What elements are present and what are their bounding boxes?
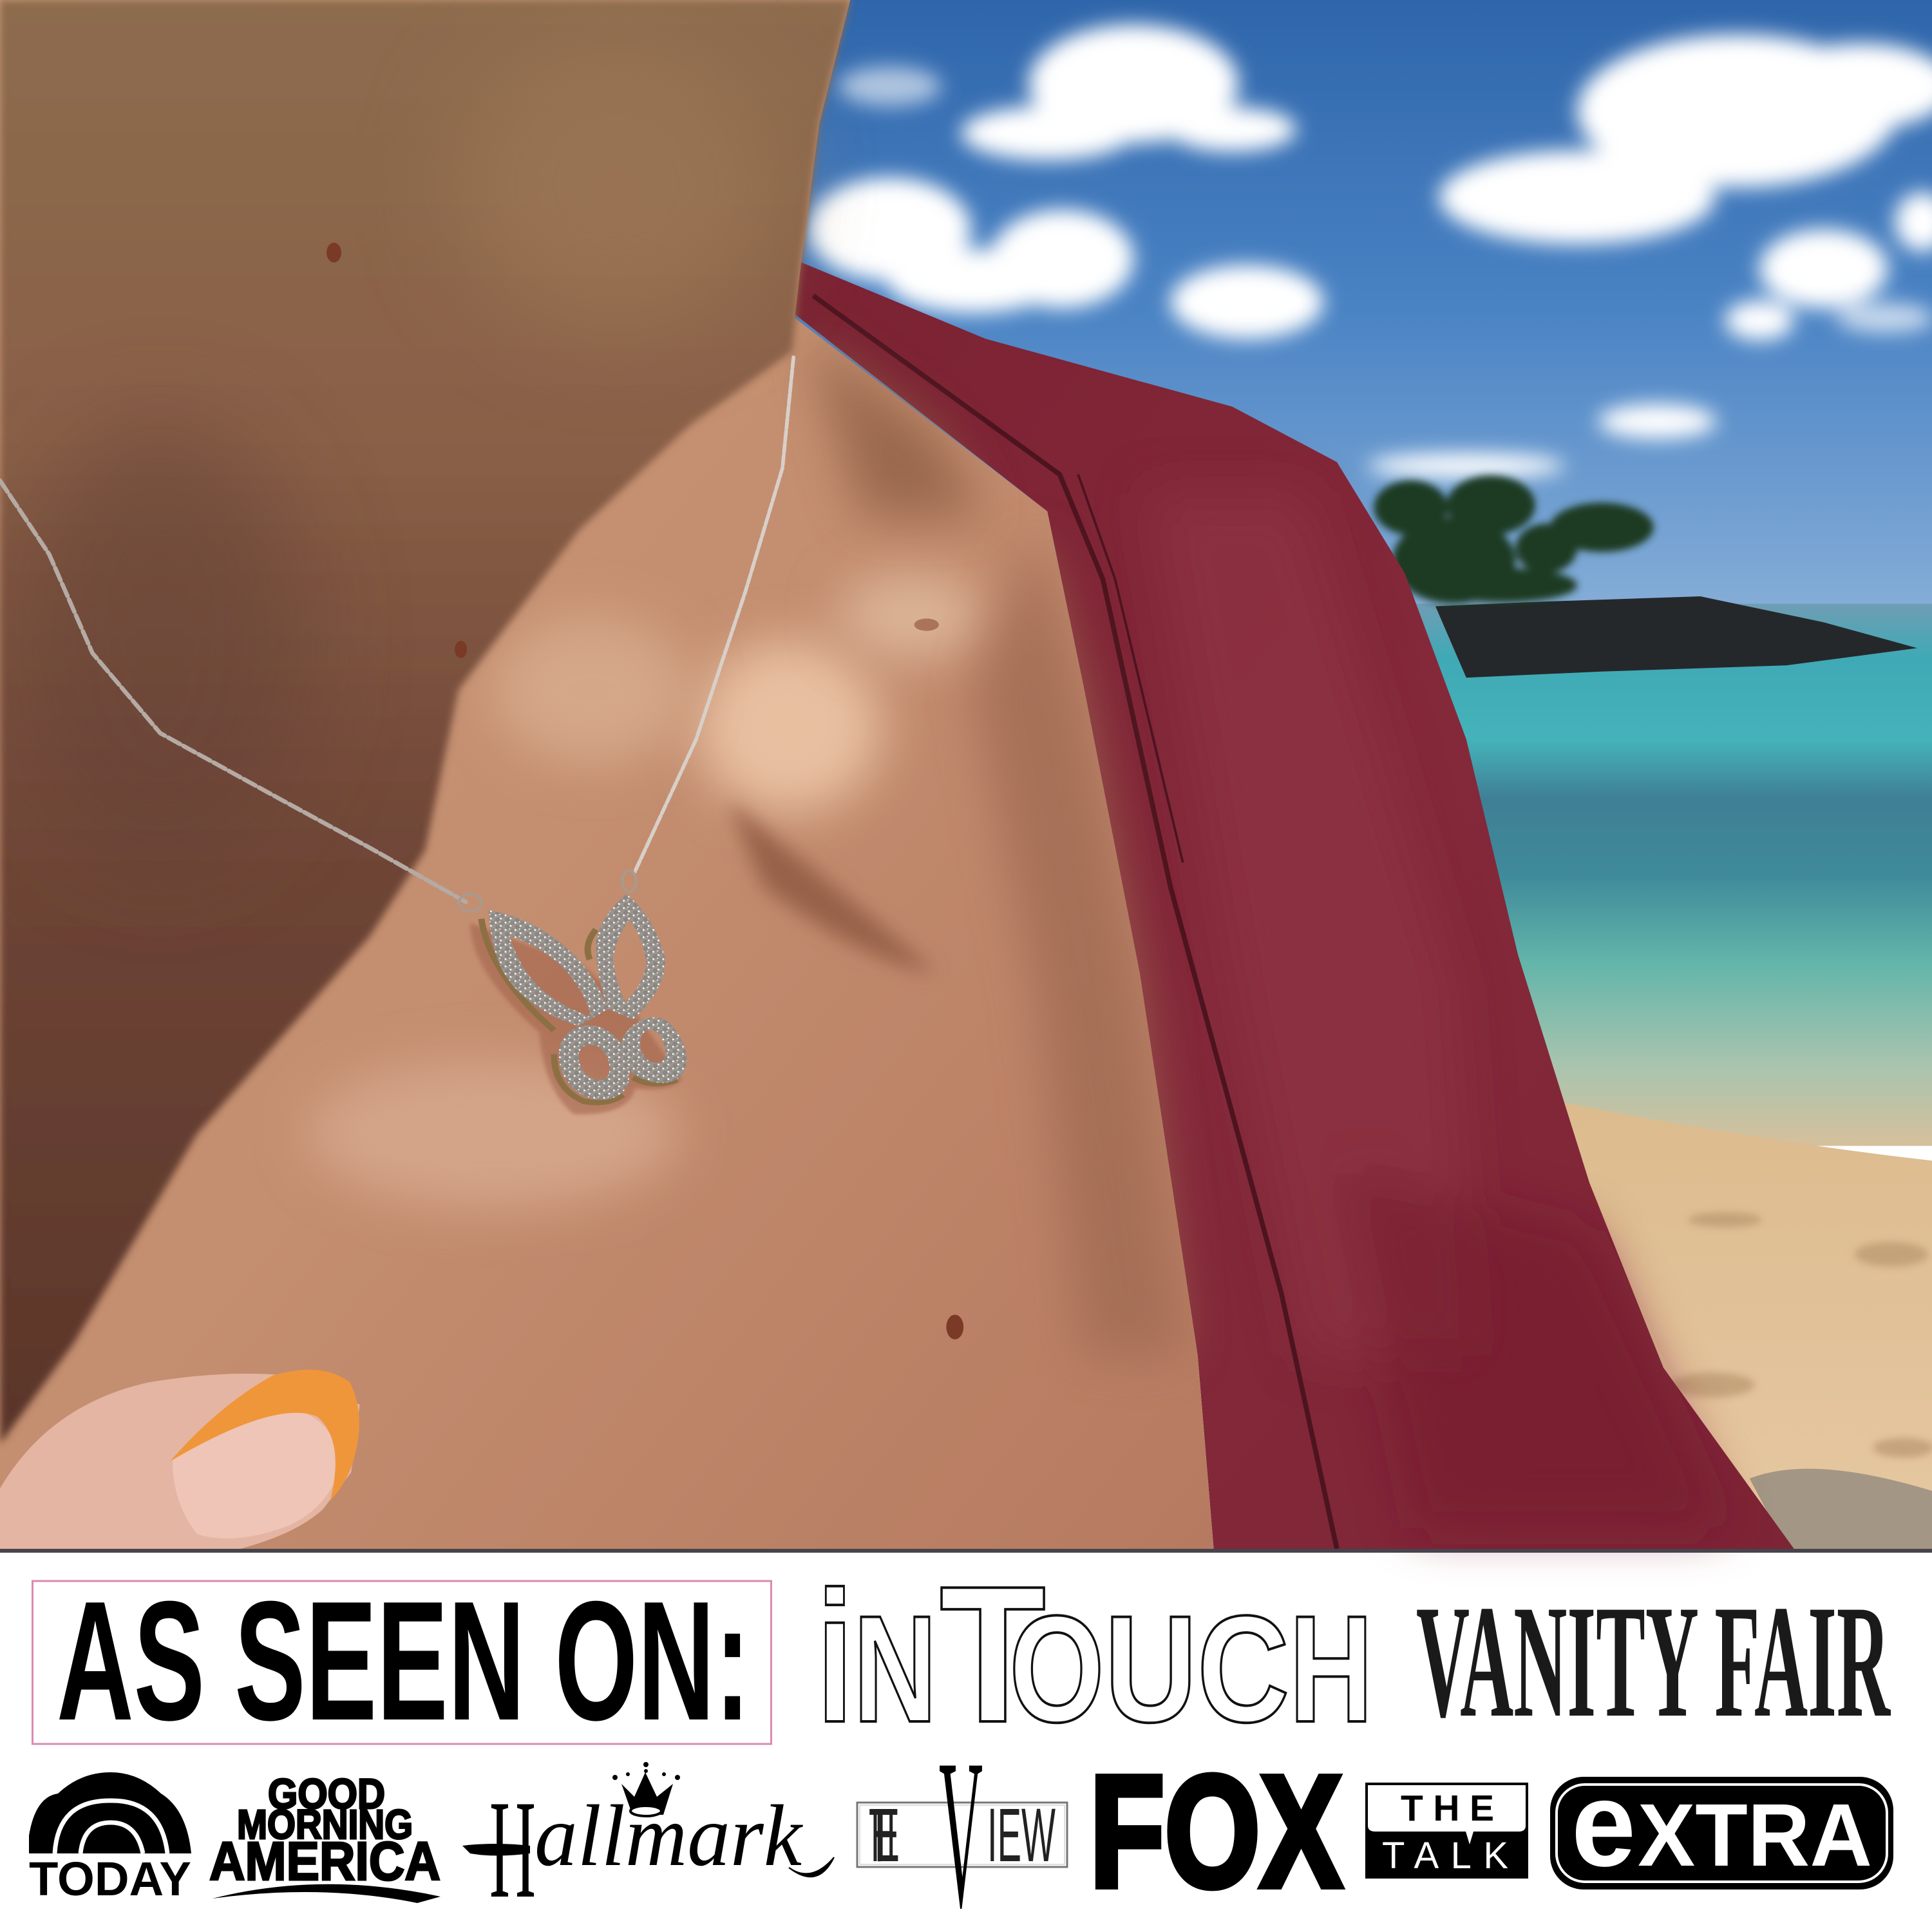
- view frame: [857, 1803, 1067, 1867]
- left wing: [489, 910, 608, 1026]
- gma swoosh: [213, 1884, 440, 1903]
- talk label: the: THE: [1401, 1788, 1494, 1829]
- coral rock: [1750, 1469, 1932, 1549]
- logo: in touch: H: [1289, 1584, 1373, 1754]
- palm trees: [1374, 476, 1654, 604]
- hallmark tail: [789, 1857, 834, 1877]
- finger with orange nail: [0, 1370, 360, 1549]
- right wing: [596, 894, 665, 1019]
- chain: [0, 357, 793, 902]
- logo: in touch: [817, 1546, 1373, 1763]
- rocky island: [1435, 596, 1917, 677]
- neck shadow tonal variation: [12, 37, 776, 862]
- view label: the: THE: [869, 1793, 900, 1878]
- shirt seam: [813, 296, 1337, 1549]
- hallmark script: allmark: [535, 1788, 804, 1884]
- finger: [0, 1374, 360, 1549]
- logo: good morning america: GOOD: [268, 1770, 385, 1817]
- footprints in the sand: [1671, 1213, 1932, 1457]
- clouds: [808, 24, 1932, 478]
- pendant bail loops: [459, 871, 636, 911]
- logo: in touch: i: [817, 1553, 853, 1761]
- photo lower edge band: [0, 1549, 1932, 1553]
- extra badge: [1550, 1777, 1893, 1889]
- skin highlights and hollows: [308, 333, 1183, 1356]
- nail: [173, 1407, 340, 1539]
- skin: lit chest: [0, 0, 1214, 1549]
- sky: [788, 0, 1932, 616]
- logo: the view: [857, 1715, 1067, 1932]
- logo: hallmark: [462, 1762, 834, 1927]
- today wordmark: TODAY: [29, 1852, 191, 1906]
- callout box: as seen on: [32, 1566, 772, 1756]
- shirt shoulder: [795, 261, 1794, 1549]
- logo: good morning america: AMERICA: [209, 1831, 440, 1891]
- speech bubble: [1368, 1785, 1526, 1844]
- logo: in touch: N: [853, 1584, 937, 1754]
- logo: in touch: U: [1104, 1584, 1197, 1754]
- talk box: [1365, 1783, 1528, 1879]
- logo: extra: XTRA: [1638, 1786, 1872, 1885]
- logo: extra: [1550, 1756, 1893, 1891]
- pink frame: [32, 1581, 772, 1744]
- sand beach: [1565, 1103, 1932, 1549]
- right ring: [621, 1018, 687, 1083]
- pendant cast shadow: [470, 923, 682, 1114]
- logo: in touch: T: [940, 1546, 1046, 1763]
- moles: [327, 243, 963, 1340]
- left ring: [559, 1025, 630, 1100]
- hallmark crossbar: [462, 1844, 530, 1856]
- crown: [612, 1762, 680, 1816]
- today rainbow arches: [29, 1772, 191, 1853]
- logo: the talk: [1365, 1783, 1528, 1879]
- neck shadow: [0, 0, 850, 1444]
- pendant metal edge: [481, 919, 677, 1103]
- logo: hallmark: H: [489, 1772, 536, 1927]
- butterfly pendant: [459, 871, 687, 1114]
- logo: the view: IEW: [987, 1793, 1056, 1878]
- logo: in touch: O: [1009, 1584, 1104, 1754]
- sea: [1356, 604, 1932, 1146]
- shirt folds and light: [1146, 493, 1725, 1528]
- logo: in touch: C: [1197, 1584, 1289, 1754]
- logo: good morning america: MORNING: [237, 1801, 413, 1848]
- logo: today: [29, 1772, 191, 1906]
- extra wordmark: e: [1571, 1756, 1636, 1891]
- logo: fox: FOX: [1090, 1743, 1342, 1920]
- talk label: talk: TALK: [1382, 1835, 1508, 1877]
- orange french tip: [170, 1370, 359, 1501]
- heading: as seen on: AS SEEN ON:: [57, 1566, 750, 1756]
- logo: good morning america: [209, 1770, 440, 1903]
